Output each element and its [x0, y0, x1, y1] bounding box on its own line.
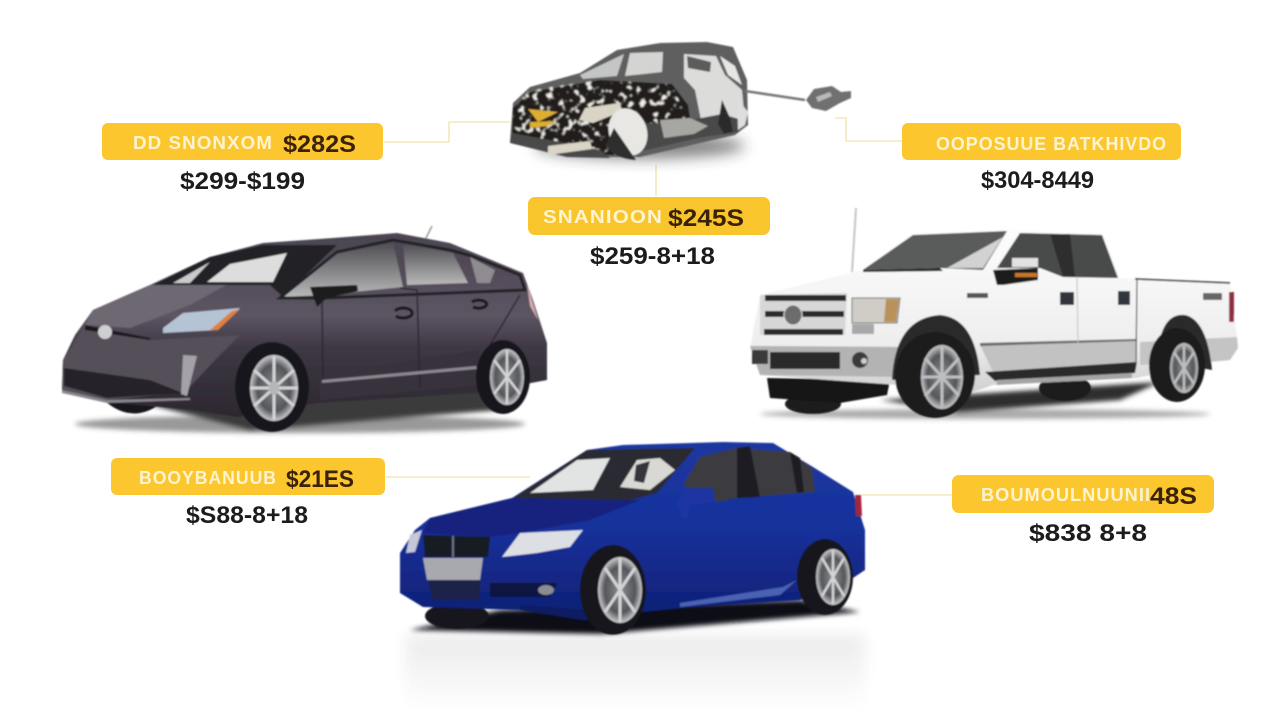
callout: top right: $304-8449	[981, 167, 1094, 194]
callout: top left	[102, 123, 383, 195]
sedan body	[400, 442, 865, 620]
grille	[760, 293, 847, 335]
callout: lower right: $838 8+8	[1029, 520, 1147, 547]
image: white pickup truck	[750, 208, 1238, 419]
callout: lower right	[952, 475, 1214, 547]
bumper	[750, 346, 903, 377]
callout: lower left: BOOYBANUUB	[139, 468, 277, 488]
car body	[62, 233, 547, 417]
callout: top right	[902, 123, 1181, 194]
image: cutaway car, centre top	[510, 42, 851, 161]
connector lines	[384, 118, 952, 495]
callout: lower right: BOUMOULNUUNII	[981, 485, 1151, 505]
image: blue sedan	[400, 442, 865, 710]
callout: centre: $259-8+18	[590, 243, 715, 270]
callout: top left: $282S	[283, 131, 356, 158]
wheels	[580, 545, 646, 635]
wheels	[892, 315, 980, 380]
callout: lower left: $21ES	[286, 466, 354, 493]
callout: top left: DD SNONXOM	[133, 133, 273, 153]
callout: lower left	[111, 458, 385, 529]
callout: lower left: $S88-8+18	[186, 502, 308, 529]
callout: centre	[528, 197, 770, 270]
truck body	[750, 229, 1238, 392]
callout: top left: $299-$199	[180, 168, 305, 195]
callout: lower right: 48S	[1150, 483, 1197, 510]
image: dark grey hatchback	[62, 226, 547, 433]
wheels	[235, 342, 309, 432]
callout: centre: SNANIOON	[543, 207, 663, 227]
callout: top right: OOPOSUUE BATKHIVDO	[936, 134, 1167, 154]
windows	[153, 245, 337, 297]
callout: centre: $245S	[668, 205, 744, 232]
